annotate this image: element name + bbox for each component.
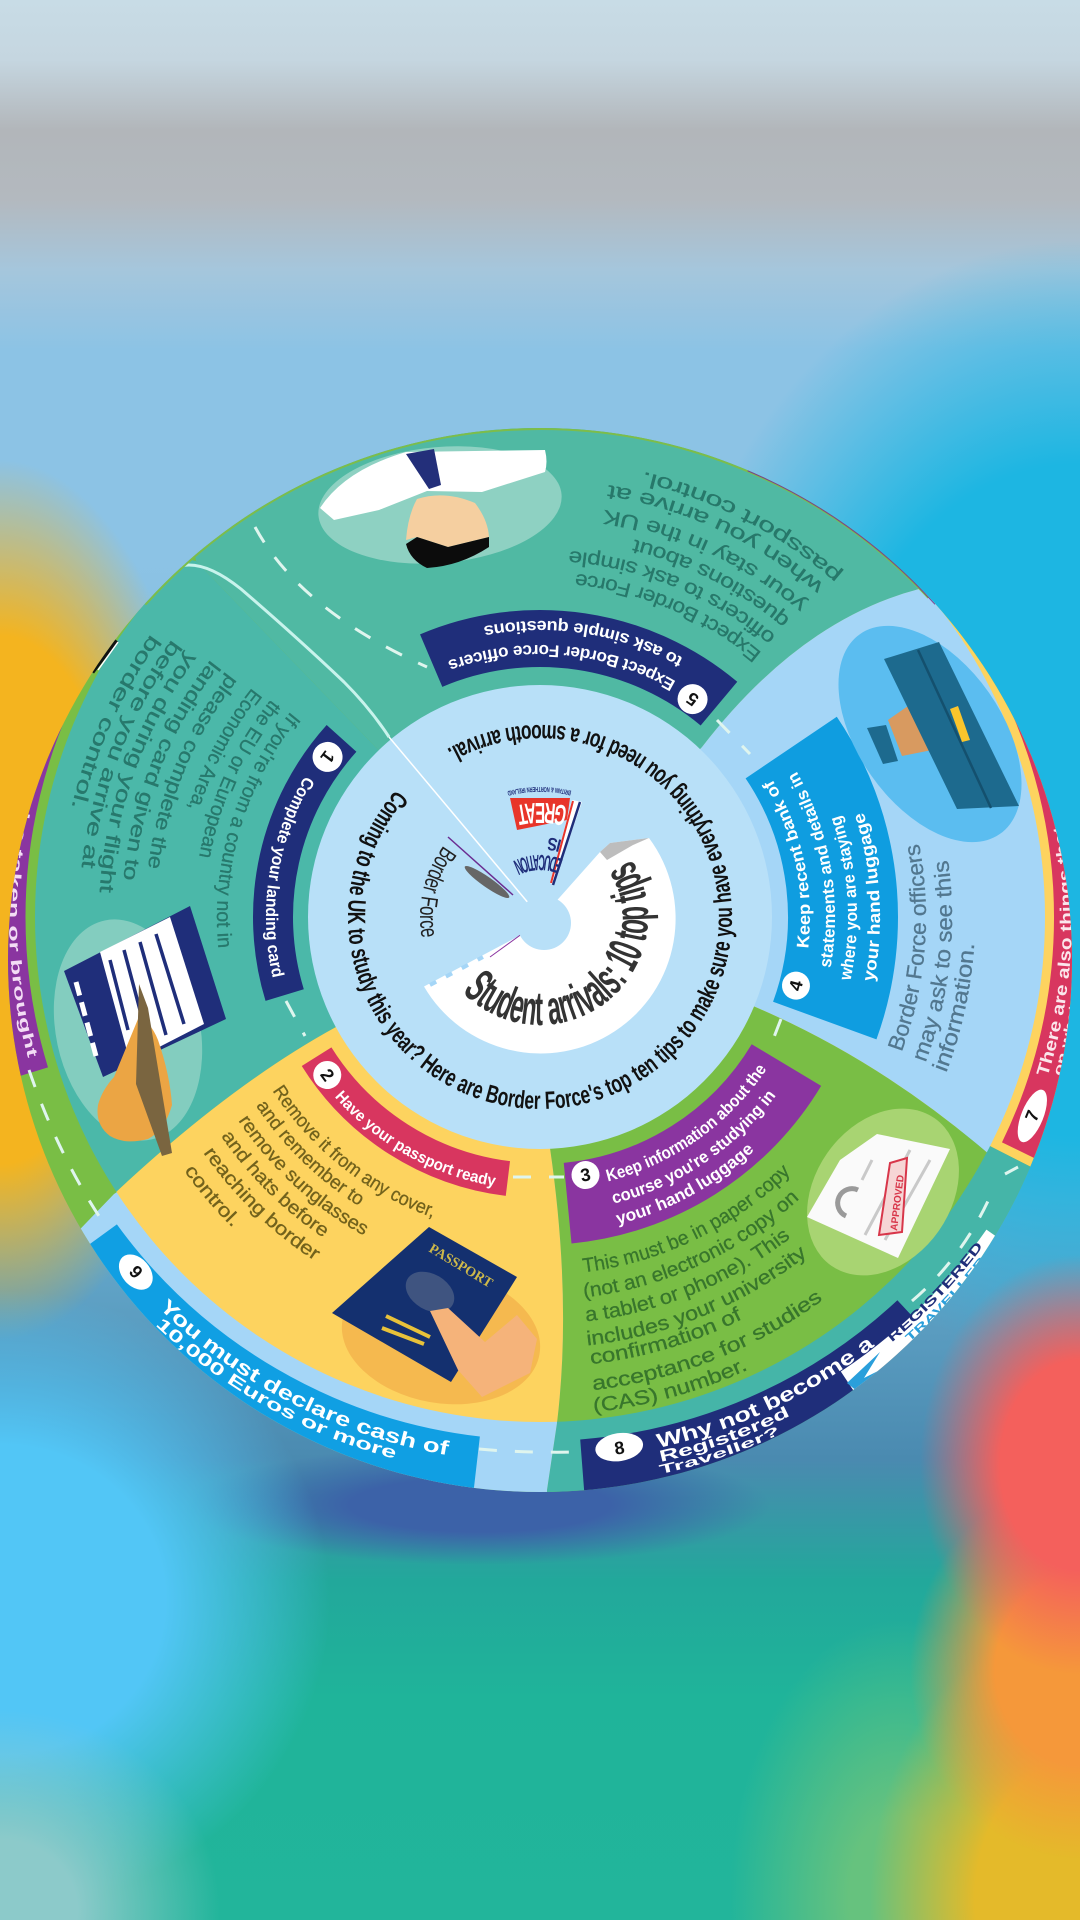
panel: tip 1 (54, 636, 356, 1156)
text: tip 1 body: please complete the (148, 672, 236, 868)
text: tip 3 body: This must be in paper copy (582, 1165, 789, 1272)
icon: border force officer (313, 437, 567, 573)
heading band: tip 4: Keep recent bank of (762, 781, 814, 948)
heading band: tip 4: where you are staying (832, 816, 860, 980)
text: tip 5 body (570, 472, 844, 662)
heading band: tip 4 (746, 716, 898, 1040)
text: tip 2 body: and remember to (257, 1102, 362, 1204)
logo: Education is GREAT: EDUCATION (504, 836, 566, 892)
icon: landing card and pen (54, 906, 226, 1156)
text: tip 3 body: (not an electronic copy on (584, 1192, 799, 1302)
icon: number 7 (1018, 1090, 1047, 1142)
logo: Education is GREAT: GREAT (508, 787, 571, 840)
text: tip 2 body: and hats before (222, 1132, 327, 1236)
text: tip 2 body: remove sunglasses (238, 1116, 368, 1234)
panel: sector 4 light blue (700, 588, 1045, 1152)
text: tip 2 body (186, 1084, 432, 1259)
text: tip 3 body (582, 1165, 822, 1416)
panel: tip 2 (158, 591, 874, 1404)
icon: hand luggage (801, 593, 1059, 875)
logo: Border Force: Border Force (384, 841, 487, 951)
icon: number 7: 7 (1021, 1108, 1043, 1124)
icon: approved document (807, 1108, 959, 1276)
text: tip 1 body: border control. (72, 636, 162, 806)
text: tip 3 body: confirmation of (591, 1306, 740, 1364)
heading band: tip 3: your hand luggage (616, 1146, 753, 1228)
heading band: tip 1: Complete your landing card (262, 778, 314, 978)
text: tip 4 body (888, 844, 974, 1072)
logo: registered traveller: REGISTERED (888, 1243, 981, 1342)
panel: tip 9 declare cash banner (90, 1224, 480, 1488)
panel: sector 3 green (550, 1006, 987, 1422)
text: tip 5 body: officers to ask simple (558, 493, 779, 699)
text: tip 5 body: passport control. (632, 425, 846, 627)
panel: tip 9 declare cash banner: 10,000 Euros or more (156, 1319, 396, 1458)
heading band: tip 4: statements and details in (790, 772, 836, 968)
logo: Education is GREAT (508, 787, 582, 886)
panel: tip 5 (318, 446, 844, 726)
panel: tip 9 declare cash banner: You must declare cash of (164, 1298, 450, 1455)
heading band: tip 5: Expect Border Force officers (440, 572, 678, 774)
text: tip 1 body (72, 636, 300, 948)
panel: tip 7 magenta banner: There are also things that you cannot bring (1036, 828, 1072, 1074)
panel: tip 8 registered traveller banner (580, 1230, 995, 1490)
icon: number 8: 8 (613, 1437, 626, 1459)
icon: passport in hand: PASSPORT (426, 1242, 496, 1292)
heading band: tip 2 (302, 1047, 510, 1196)
panel: white title sector (424, 838, 676, 1054)
heading band: tip 3: Keep information about the (606, 1066, 766, 1182)
icon: number 2: 2 (316, 1065, 338, 1085)
text: tip 1 body: If you're from a country not in (214, 712, 300, 948)
heading band: tip 5 (420, 610, 738, 726)
icon: number 8 (595, 1432, 644, 1462)
panel: tip 3 (564, 1044, 959, 1416)
title: Student arrivals: 10 top tips (452, 834, 707, 1086)
dashed route lines (29, 527, 1018, 1452)
heading band: tip 3: course you're studying in (612, 1092, 776, 1203)
panel: tip 8 registered traveller banner: Traveller? (658, 1428, 777, 1473)
text: tip 5 body: your stay in the UK (592, 458, 811, 661)
logo: registered traveller (840, 1230, 995, 1390)
text: tip 1 body: Economic Area, (186, 689, 262, 808)
icon: number 1: 1 (317, 747, 339, 767)
text: tip 2 body: reaching border (204, 1148, 320, 1259)
heading band: tip 4: your hand luggage (856, 814, 880, 982)
icon: number 3: 3 (579, 1164, 592, 1186)
text: tip 4 body: information. (909, 935, 998, 1075)
text: circular introduction: Coming to the UK to study this year? Here are Border Force's top ten tips to make sure you have everything you need for a smooth arrival. (260, 637, 820, 1197)
text: tip 2 body: control. (186, 1167, 238, 1226)
text: tip 3 body: acceptance for studies (594, 1292, 822, 1390)
text: tip 3 body: includes your university (587, 1246, 804, 1346)
logo: Border Force (420, 836, 514, 937)
icon: number 5: 5 (683, 688, 702, 710)
text: tip 5 body: Expect Border Force (564, 523, 765, 709)
outer ring sector 8 teal (547, 1132, 1030, 1492)
panel: tip 10 purple banner: Check what can be taken or brought (9, 814, 37, 1058)
text: tip 5 body: questions about (623, 504, 794, 661)
divider line between tip 1 and tip 5 (180, 565, 540, 917)
text: tip 3 body: a tablet or phone). This (586, 1230, 790, 1322)
text: tip 2 body: Remove it from any cover, (273, 1084, 432, 1220)
icon: number 1 (312, 742, 343, 772)
wheel disc (8, 428, 1072, 1492)
text: tip 1 body: before you arrive at (82, 640, 183, 868)
icon: passport in hand (332, 1227, 540, 1404)
icon: number 4: 4 (785, 978, 807, 993)
panel: tip 8 registered traveller banner: Why not become a (655, 1340, 875, 1447)
outer ring sector 7 yellow (754, 587, 1072, 1166)
text: tip 4 body: Border Force officers (832, 835, 978, 1054)
outer ring sector 9 light blue (80, 1192, 557, 1492)
text: tip 1 body: the EU or European (199, 701, 280, 858)
text: tip 5 body: when you arrive at (597, 431, 829, 646)
text: tip 4 body: may ask to see this (861, 852, 1001, 1065)
icon: number 4 (782, 972, 810, 1000)
icon: approved document: APPROVED (889, 1174, 907, 1231)
text: tip 3 body: (CAS) number. (594, 1362, 746, 1416)
central hub (517, 896, 571, 950)
text: tip 1 body: landing card given to (124, 660, 222, 880)
text: tip 1 body: you during your flight (98, 650, 196, 893)
heading band: tip 2: Have your passport ready (335, 1090, 496, 1188)
icon: number 3 (572, 1161, 600, 1189)
panel: tip 7 magenta banner (1002, 718, 1072, 1158)
panel: sector 1 teal (35, 560, 379, 1192)
heading band: tip 1 (253, 725, 356, 1001)
outer ring base (0, 420, 1080, 1500)
panel: tip 8 registered traveller banner: Registered (660, 1406, 789, 1462)
logo: Education is GREAT: IS (544, 832, 564, 857)
panel: tip 4 (746, 626, 1022, 1072)
panel: sector 2 yellow (116, 1027, 564, 1422)
wheel sectors (35, 428, 1045, 1422)
heading band: tip 5: to ask simple questions (475, 561, 686, 729)
heading band: tip 3 (564, 1044, 822, 1244)
inner light blue circle (308, 685, 772, 1149)
logo: Education is GREAT: BRITAIN & NORTHERN IRELAND (505, 774, 572, 811)
icon: number 2 (313, 1061, 342, 1089)
icon: number 9: 9 (125, 1262, 147, 1282)
rim slivers (0, 210, 1080, 1710)
icon: number 5 (672, 678, 713, 720)
panel: sector 5 teal (195, 428, 918, 750)
logo: registered traveller: TRAVELLER (904, 1258, 981, 1340)
icon: number 9 (118, 1254, 153, 1290)
